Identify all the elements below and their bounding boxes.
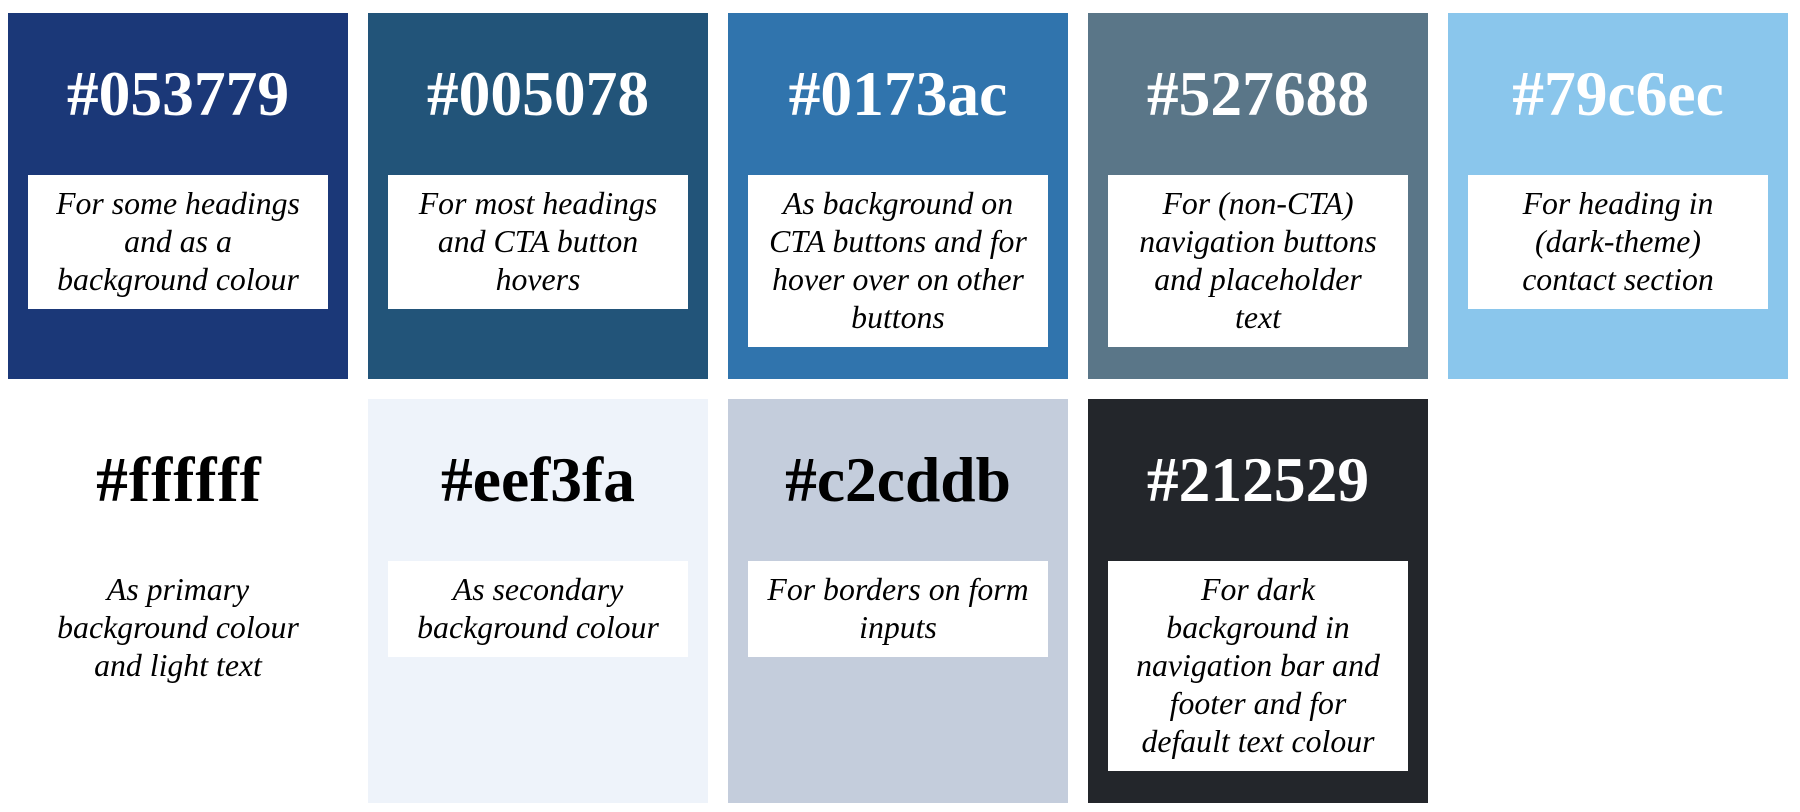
- heading: #eef3fa: #eef3fa: [441, 444, 635, 515]
- usage text: #eef3fa: As secondary: [453, 572, 623, 607]
- panel: colour swatch #79c6ec: [1448, 13, 1788, 379]
- heading: #0173ac: #0173ac: [789, 58, 1007, 129]
- usage text: #ffffff: [28, 561, 328, 695]
- usage text: #053779: For some headings: [56, 186, 300, 221]
- usage text: #c2cddb: [748, 561, 1048, 657]
- heading: #79c6ec: #79c6ec: [1512, 58, 1724, 129]
- usage text: #053779: [28, 175, 328, 309]
- usage text: #c2cddb: For borders on form: [767, 572, 1029, 607]
- usage text: #527688: For (non-CTA): [1162, 186, 1354, 221]
- usage text: #ffffff: background colour: [57, 610, 299, 645]
- usage text: #212529: default text colour: [1141, 724, 1375, 759]
- usage text: #0173ac: hover over on other: [772, 262, 1024, 297]
- usage text: #212529: [1108, 561, 1408, 771]
- panel: colour swatch #212529: [1088, 399, 1428, 803]
- usage text: #527688: text: [1235, 300, 1281, 335]
- panel: colour swatch #c2cddb: [728, 399, 1068, 803]
- panel: colour swatch #ffffff: [8, 399, 348, 803]
- usage text: #527688: [1108, 175, 1408, 347]
- usage text: #0173ac: CTA buttons and for: [769, 224, 1027, 259]
- usage text: #212529: background in: [1166, 610, 1350, 645]
- usage text: #005078: [388, 175, 688, 309]
- panel: colour swatch #053779: [8, 13, 348, 379]
- usage text: #005078: For most headings: [419, 186, 657, 221]
- heading: #005078: #005078: [427, 58, 649, 129]
- heading: #212529: #212529: [1147, 444, 1369, 515]
- usage text: #0173ac: [748, 175, 1048, 347]
- panel: colour swatch #527688: [1088, 13, 1428, 379]
- usage text: #005078: hovers: [496, 262, 580, 297]
- usage text: #212529: navigation bar and: [1136, 648, 1380, 683]
- usage text: #527688: and placeholder: [1154, 262, 1362, 297]
- usage text: #053779: background colour: [57, 262, 299, 297]
- usage text: #79c6ec: (dark-theme): [1535, 224, 1701, 259]
- usage text: #eef3fa: background colour: [417, 610, 659, 645]
- heading: #527688: #527688: [1147, 58, 1369, 129]
- panel: colour swatch #0173ac: [728, 13, 1068, 379]
- usage text: #eef3fa: [388, 561, 688, 657]
- usage text: #005078: and CTA button: [438, 224, 638, 259]
- usage text: #c2cddb: inputs: [859, 610, 937, 645]
- usage text: #79c6ec: contact section: [1522, 262, 1714, 297]
- usage text: #053779: and as a: [124, 224, 232, 259]
- panel: colour swatch #eef3fa: [368, 399, 708, 803]
- usage text: #0173ac: buttons: [851, 300, 945, 335]
- heading: #053779: #053779: [67, 58, 289, 129]
- panel: colour swatch #005078: [368, 13, 708, 379]
- usage text: #0173ac: As background on: [783, 186, 1013, 221]
- heading: #ffffff: #ffffff: [96, 444, 262, 515]
- usage text: #ffffff: and light text: [94, 648, 262, 683]
- usage text: #79c6ec: For heading in: [1523, 186, 1713, 221]
- heading: #c2cddb: #c2cddb: [785, 444, 1011, 515]
- usage text: #212529: footer and for: [1170, 686, 1346, 721]
- usage text: #527688: navigation buttons: [1139, 224, 1377, 259]
- usage text: #79c6ec: [1468, 175, 1768, 309]
- usage text: #212529: For dark: [1201, 572, 1315, 607]
- usage text: #ffffff: As primary: [107, 572, 249, 607]
